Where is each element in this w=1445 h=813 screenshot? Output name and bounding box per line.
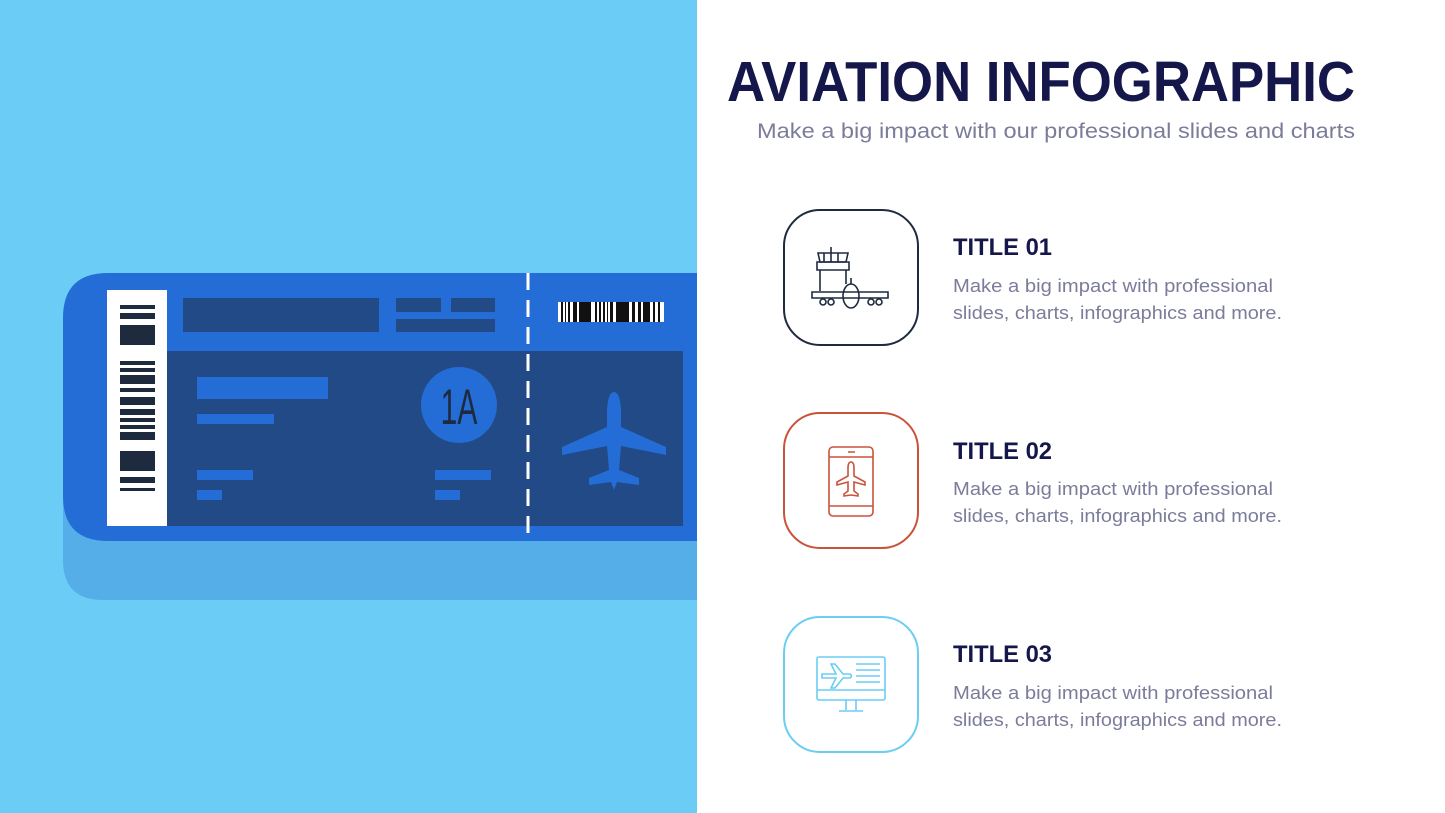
seat badge 1A (421, 367, 497, 443)
item 3: monitor: slides, charts, infographics and more. (953, 710, 1282, 730)
ticket shadow (63, 300, 697, 600)
boarding pass ticket (63, 273, 697, 541)
item 1 heading: TITLE 01 (953, 234, 1052, 261)
item 1: control tower (784, 210, 1282, 345)
item 2 text: Make a big impact with professional (953, 479, 1273, 499)
icon: plane (562, 392, 666, 490)
item 1: control tower: slides, charts, infographics and more. (953, 303, 1282, 323)
subtitle: Make a big impact with our professional slides and charts (757, 120, 1355, 143)
title: AVIATION INFOGRAPHIC (727, 50, 1355, 114)
barcode (558, 302, 664, 322)
item 1 text: Make a big impact with professional (953, 276, 1273, 296)
item 3 text: Make a big impact with professional (953, 683, 1273, 703)
icon box 2 (784, 413, 918, 548)
item 2 heading: TITLE 02 (953, 438, 1052, 465)
icon box 3 (784, 617, 918, 752)
seat badge 1A: 1A (441, 379, 478, 435)
item 2: phone plane: slides, charts, infographics and more. (953, 506, 1282, 526)
dashed tear line (526, 273, 530, 541)
item 3: monitor (784, 617, 1282, 752)
item 3 heading: TITLE 03 (953, 641, 1052, 668)
panel: left light blue background (0, 0, 697, 813)
item 2: phone plane (784, 413, 1282, 548)
icon box 1 (784, 210, 918, 345)
